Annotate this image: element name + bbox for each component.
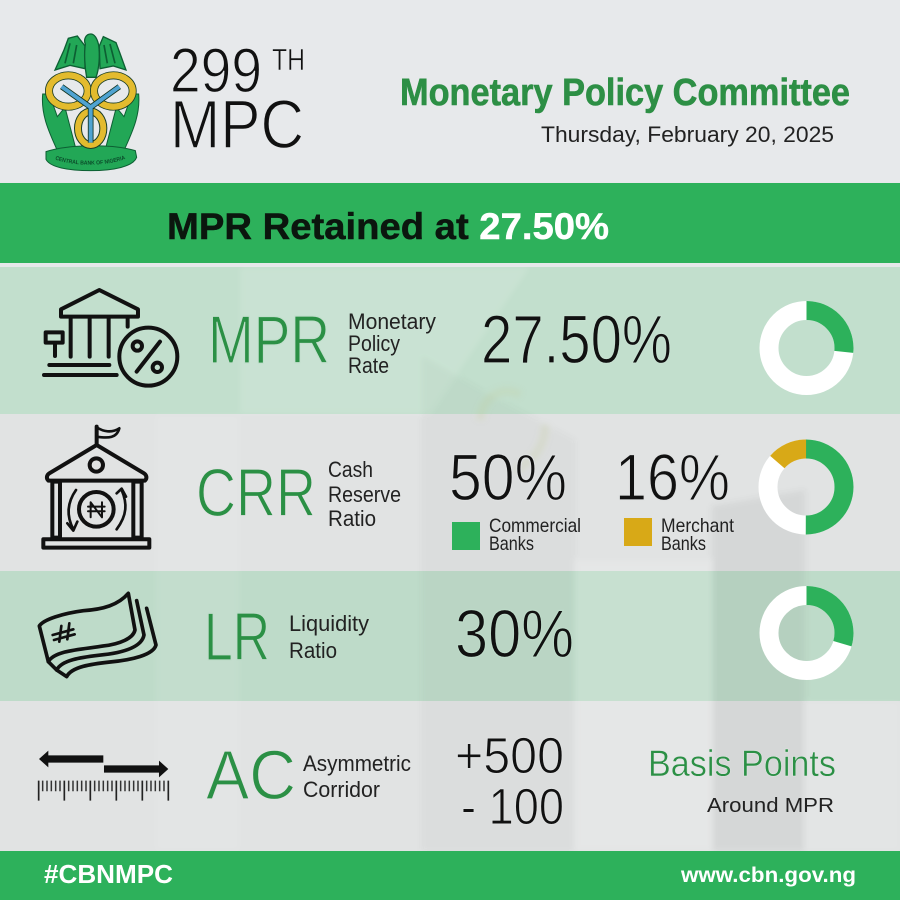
- legend: commercial banks: Commercial: [489, 515, 581, 537]
- hashtag: #CBNMPC: [44, 859, 173, 889]
- text: Cash Reserve Ratio: Cash: [328, 457, 373, 482]
- label: CRR: CRR: [196, 455, 316, 531]
- panel: LR row background: [0, 571, 900, 701]
- icon: Central Bank of Nigeria crest: CENTRAL BANK OF NIGERIA: [56, 156, 126, 165]
- panel: footer: [0, 851, 900, 900]
- panel: MPR row background: [0, 267, 900, 414]
- value: liquidity ratio 30%: 30%: [455, 596, 574, 672]
- text: Cash Reserve Ratio: Ratio: [328, 506, 376, 531]
- legend: commercial banks: [452, 515, 581, 555]
- website: www.cbn.gov.ng: [680, 864, 856, 887]
- text: Cash Reserve Ratio: [328, 457, 401, 531]
- value: MPR 27.50%: 27.50%: [481, 301, 672, 378]
- icon: Central Bank of Nigeria crest: [42, 33, 140, 172]
- text: Asymmetric Corridor: Corridor: [303, 777, 380, 802]
- panel: AC row background: [0, 701, 900, 851]
- icon: naira banknotes: [39, 593, 156, 677]
- panel: headline band: [0, 183, 900, 263]
- heading: 299th MPC: MPC: [170, 86, 304, 163]
- label: LR: LR: [204, 599, 270, 675]
- legend: commercial banks: Banks: [489, 533, 534, 555]
- icon: asymmetric corridor arrows and ruler: [39, 751, 168, 801]
- legend: merchant banks: Banks: [661, 533, 706, 555]
- text: Monetary Policy Rate: Monetary: [348, 309, 436, 334]
- heading: MPR retained: MPR Retained at 27.50%: [167, 205, 609, 247]
- value: commercial banks 50%: 50%: [449, 440, 567, 514]
- chart: LR donut: [769, 596, 844, 670]
- text: Liquidity Ratio: Ratio: [289, 638, 337, 663]
- text: Cash Reserve Ratio: Reserve: [328, 482, 401, 507]
- panel: header background: [0, 0, 900, 182]
- heading: Monetary Policy Committee: Monetary Policy Committee: [400, 72, 850, 114]
- text: Basis Points: Basis Points: [648, 743, 836, 784]
- text: Asymmetric Corridor: [303, 751, 411, 802]
- panel: CRR row background: [0, 414, 900, 571]
- value: corridor +500 / -100: - 100: [461, 778, 564, 835]
- text: Asymmetric Corridor: Asymmetric: [303, 751, 411, 776]
- text: Around MPR: Around MPR: [707, 794, 834, 817]
- text: meeting date: Thursday, February 20, 2025: [541, 122, 834, 147]
- icon: bank with percent: [44, 290, 177, 386]
- text: Liquidity Ratio: Liquidity: [289, 611, 369, 636]
- heading: 299th MPC: [170, 36, 305, 163]
- text: Liquidity Ratio: [289, 611, 369, 663]
- chart: MPR donut: [769, 310, 844, 386]
- heading: 299th MPC: 299: [170, 36, 262, 106]
- label: AC: AC: [206, 736, 296, 814]
- legend: merchant banks: [624, 515, 735, 555]
- heading: 299th MPC: TH: [272, 42, 305, 77]
- icon: central bank building with naira: [43, 427, 149, 548]
- chart: CRR donut: [752, 433, 860, 541]
- label: MPR: MPR: [208, 302, 330, 378]
- faint building photo backdrop: [155, 267, 900, 851]
- legend: merchant banks: Merchant: [661, 515, 735, 537]
- text: Monetary Policy Rate: Policy: [348, 331, 400, 356]
- value: corridor +500 / -100: [455, 727, 564, 835]
- text: Monetary Policy Rate: Rate: [348, 353, 389, 378]
- text: Monetary Policy Rate: [348, 309, 436, 378]
- value: corridor +500 / -100: +500: [455, 727, 564, 784]
- value: merchant banks 16%: 16%: [615, 440, 730, 514]
